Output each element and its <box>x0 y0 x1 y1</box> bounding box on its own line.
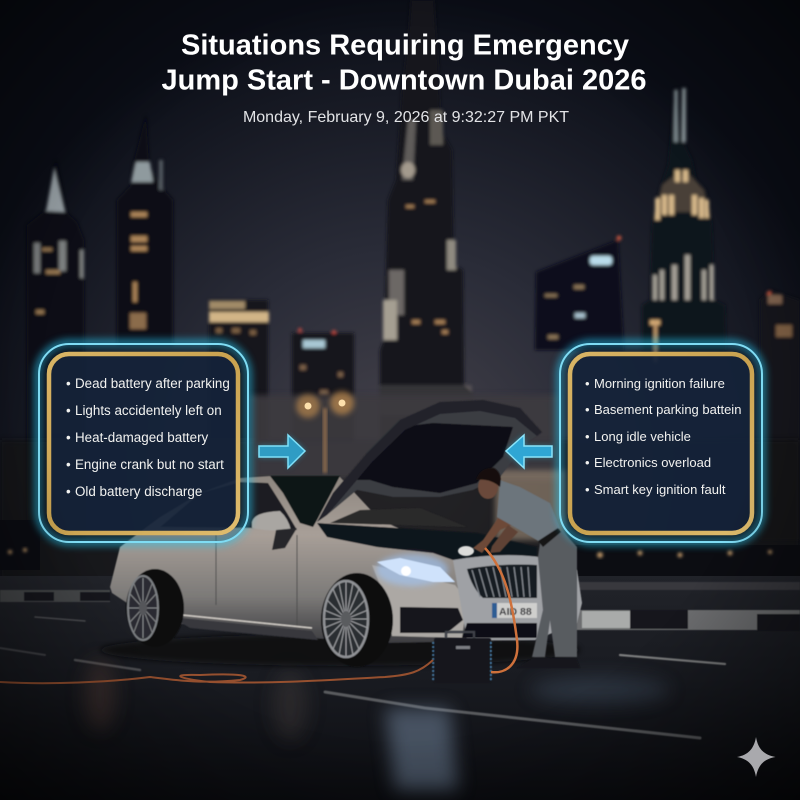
car: license plate <box>492 603 537 618</box>
mechanic bending over the engine <box>458 468 580 668</box>
panel: right list of situations <box>560 343 762 542</box>
panel: left list of situations <box>38 343 248 542</box>
list items: • <box>66 484 71 499</box>
road: pavement curbs <box>0 582 800 631</box>
car: license plate: AID 88 <box>499 606 532 618</box>
list items: Electronics overload <box>594 455 711 470</box>
list items: Dead battery after parking <box>75 376 230 391</box>
car: open hood <box>317 400 542 522</box>
panel cyan border <box>560 344 762 542</box>
skyline: blurred Downtown Dubai towers <box>27 0 800 540</box>
car: rear wheel <box>126 569 184 647</box>
list items: • <box>585 482 590 497</box>
panel gold card <box>570 354 752 533</box>
car: silver sedan with raised hood <box>100 400 582 667</box>
tower: sloped roof building <box>535 236 624 350</box>
road: wet reflection <box>84 659 670 790</box>
jumper cables: orange <box>0 548 517 683</box>
tower: left twin <box>117 115 173 345</box>
car: grille <box>467 564 537 598</box>
road: lane markings <box>0 617 725 738</box>
midground: city lights behind the car <box>0 391 800 580</box>
icon: four-point sparkle <box>737 737 776 777</box>
car: windshield seen below hood <box>330 508 467 527</box>
list items: Morning ignition failure <box>594 376 725 391</box>
arrow: right panel pointing to car <box>506 435 552 468</box>
jump starter: portable battery box <box>433 632 491 683</box>
list items: • <box>66 376 71 391</box>
tower: far right <box>760 290 800 540</box>
mechanic: belt <box>538 528 561 547</box>
panel glow <box>560 343 762 542</box>
list items: Long idle vehicle <box>594 429 691 444</box>
mechanic: head <box>476 468 501 499</box>
car shadow <box>100 634 580 666</box>
list items: • <box>66 457 71 472</box>
list items: • <box>585 376 590 391</box>
tower: far left <box>27 160 84 540</box>
car: front bumper <box>453 555 582 640</box>
list items: Old battery discharge <box>75 484 202 499</box>
list items: Lights accidentely left on <box>75 403 222 418</box>
list items: • <box>585 402 590 417</box>
car body <box>110 476 582 643</box>
car: headlight <box>376 554 455 586</box>
title: Situations Requiring Emergency <box>181 30 629 62</box>
mechanic: torso <box>497 480 560 542</box>
list items: Heat-damaged battery <box>75 430 209 445</box>
car: side mirror <box>252 511 291 531</box>
tower: art-deco spire <box>642 88 726 362</box>
title: Jump Start - Downtown Dubai 2026 <box>162 64 646 96</box>
list items <box>585 376 741 497</box>
car: bumper intake <box>400 607 463 633</box>
list items: • <box>585 455 590 470</box>
car: engine bay <box>317 523 537 560</box>
title <box>162 30 646 96</box>
panel glow <box>38 343 248 542</box>
list items: • <box>66 430 71 445</box>
panel cyan border <box>39 344 248 542</box>
mechanic: glove <box>458 546 474 556</box>
car: front wheel <box>321 573 393 667</box>
car: windshield <box>270 476 340 527</box>
subtitle: date and time: Monday, February 9, 2026 at 9:32:27 PM PKT <box>243 109 569 126</box>
list items <box>66 376 230 499</box>
mechanic: arms <box>473 518 512 553</box>
mechanic: shoes <box>517 657 580 668</box>
car: door lines <box>216 535 297 627</box>
list items: Smart key ignition fault <box>594 482 726 497</box>
list items: • <box>66 403 71 418</box>
tower: mid-left red beacons <box>292 328 354 443</box>
car: rear window <box>160 482 297 530</box>
list items: Engine crank but no start <box>75 457 224 472</box>
tower: low gold-topped building <box>209 300 269 440</box>
road surface <box>0 576 800 800</box>
mechanic: legs <box>532 530 577 657</box>
car: front fender highlight <box>372 565 467 638</box>
list items: • <box>585 429 590 444</box>
panel gold card <box>49 354 238 533</box>
car: sill trim <box>172 614 312 628</box>
tower: Burj Khalifa <box>380 0 472 440</box>
arrow: left panel pointing to car <box>259 435 305 468</box>
list items: Basement parking battein <box>594 402 741 417</box>
